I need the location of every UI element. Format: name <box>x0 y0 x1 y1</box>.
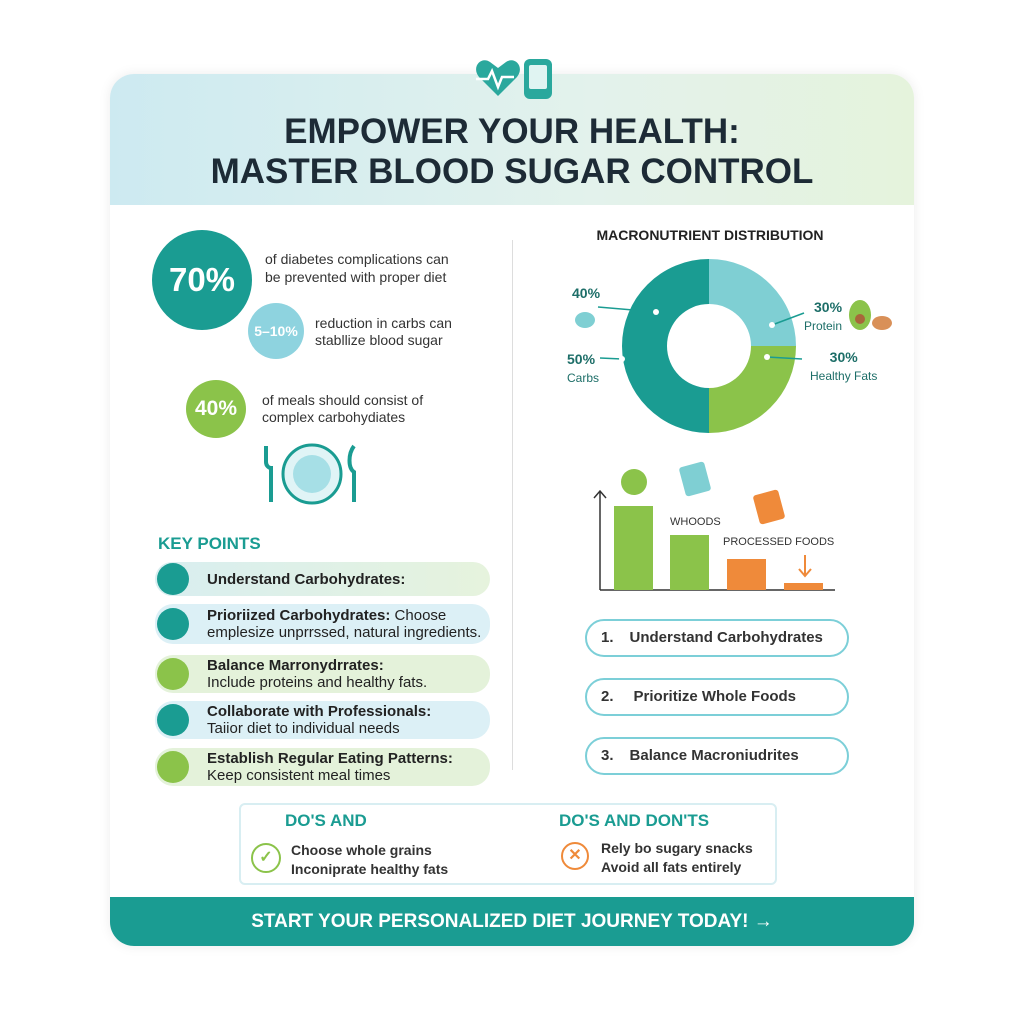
stat 40%: 40% <box>195 397 237 420</box>
stat 70% <box>152 230 449 330</box>
step 3: 3. Balance Macroniudrites <box>601 747 799 764</box>
step 1: 1. Understand Carbohydrates <box>601 629 823 646</box>
key point 5: Establish Regular Eating Patterns: <box>207 750 453 767</box>
do's and don'ts panel: Rely bo sugary snacks <box>601 840 753 856</box>
key point 4 <box>155 701 490 739</box>
key point 3: Include proteins and healthy fats. <box>207 674 427 691</box>
stat 5-10%: 5–10% <box>254 323 298 339</box>
title: MASTER BLOOD SUGAR CONTROL <box>211 152 813 191</box>
step 2 <box>585 678 849 716</box>
key point 2: emplesize unprrssed, natural ingredients. <box>207 624 481 641</box>
step 3 <box>585 737 849 775</box>
bar chart: PROCESSED FOODS <box>723 536 834 548</box>
key point 5 <box>155 748 490 786</box>
text: 50% <box>567 351 595 367</box>
key point 1 <box>155 562 490 596</box>
divider <box>512 240 513 770</box>
stat 40%: complex carbohydiates <box>262 409 405 425</box>
stat 5-10%: stabllize blood sugar <box>315 332 443 348</box>
icon: plate and cutlery <box>264 444 356 504</box>
key point 3 <box>155 655 490 693</box>
key point 4: Taiior diet to individual needs <box>207 720 400 737</box>
bar chart: WHOODS <box>670 516 721 528</box>
do's and don'ts panel: ✕ <box>568 847 582 864</box>
do's and don'ts panel <box>239 803 777 885</box>
step 1 <box>585 619 849 657</box>
stat 70%: of diabetes complications can <box>265 251 449 267</box>
do's and don'ts panel: Inconiprate healthy fats <box>291 861 448 877</box>
stat 70%: be prevented with proper diet <box>265 269 446 285</box>
icon: heart and device <box>476 59 552 99</box>
do's and don'ts panel: ✓ <box>259 849 273 866</box>
key point 5: Keep consistent meal times <box>207 767 390 784</box>
bar chart <box>594 462 835 591</box>
donut labels: 40% <box>572 285 600 301</box>
key point 1: Understand Carbohydrates: <box>207 571 405 588</box>
stat 5-10%: reduction in carbs can <box>315 315 452 331</box>
footer bar <box>110 897 914 946</box>
text: Carbs <box>567 371 599 385</box>
footer cta: START YOUR PERSONALIZED DIET JOURNEY TODAY! → <box>251 911 773 932</box>
title <box>211 112 813 191</box>
key point 2: Prioriized Carbohydrates: Choose <box>207 607 446 624</box>
donut chart <box>575 259 892 433</box>
heading: macronutrient: MACRONUTRIENT DISTRIBUTION <box>596 227 824 243</box>
text: 30% <box>814 299 842 315</box>
header band <box>110 74 914 205</box>
title: EMPOWER YOUR HEALTH: <box>284 112 740 151</box>
do's and don'ts panel: DO'S AND DON'TS <box>559 811 709 830</box>
text: Healthy Fats <box>810 369 877 383</box>
stat 40%: of meals should consist of <box>262 392 423 408</box>
key point 2 <box>155 604 490 644</box>
key point 3: Balance Marronydrrates: <box>207 657 384 674</box>
key point 4: Collaborate with Professionals: <box>207 703 431 720</box>
do's and don'ts panel: DO'S AND <box>285 811 367 830</box>
stat 40% <box>186 380 424 438</box>
do's and don'ts panel: Choose whole grains <box>291 842 432 858</box>
card <box>110 74 914 946</box>
do's and don'ts panel: Avoid all fats entirely <box>601 859 741 875</box>
step 2: 2. Prioritize Whole Foods <box>601 688 796 705</box>
stat 70%: 70% <box>169 261 235 298</box>
stat 5-10% <box>248 303 452 359</box>
text: 30% <box>830 349 858 365</box>
heading: key points: KEY POINTS <box>158 534 261 553</box>
text: Protein <box>804 319 842 333</box>
